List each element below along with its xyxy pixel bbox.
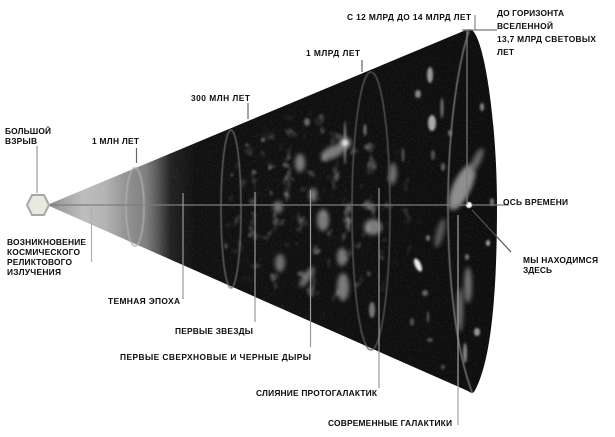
label: time axis: ОСЬ ВРЕМЕНИ xyxy=(503,197,568,207)
label: distance to horizon xyxy=(497,8,596,57)
label: dark ages: ТЕМНАЯ ЭПОХА xyxy=(108,296,180,306)
label: big bang: БОЛЬШОЙ xyxy=(5,125,51,136)
label: first supernovae and black holes: ПЕРВЫЕ СВЕРХНОВЫЕ И ЧЕРНЫЕ ДЫРЫ xyxy=(120,352,311,362)
label: 12 to 14 billion years: С 12 МЛРД ДО 14 МЛРД ЛЕТ xyxy=(347,12,472,22)
label: distance to horizon: ВСЕЛЕННОЙ xyxy=(497,20,553,31)
label: modern galaxies: СОВРЕМЕННЫЕ ГАЛАКТИКИ xyxy=(328,418,452,428)
leader lines xyxy=(37,15,511,425)
label: cosmic microwave background: ИЗЛУЧЕНИЯ xyxy=(7,267,61,277)
label: distance to horizon: 13,7 МЛРД СВЕТОВЫХ xyxy=(497,34,596,44)
cone of the universe xyxy=(47,20,500,400)
ring: 1 million years xyxy=(126,168,144,246)
label: distance to horizon: ЛЕТ xyxy=(497,47,515,57)
ring: 300 million years xyxy=(221,130,241,288)
label: cosmic microwave background: КОСМИЧЕСКОГО xyxy=(7,247,80,257)
label: we are here: МЫ НАХОДИМСЯ xyxy=(523,255,598,265)
icon: big bang hexagon xyxy=(27,195,49,215)
label: 1 million years: 1 МЛН ЛЕТ xyxy=(92,136,140,146)
label: we are here xyxy=(523,255,598,275)
label: first stars: ПЕРВЫЕ ЗВЕЗДЫ xyxy=(175,326,253,336)
label: cosmic microwave background: РЕЛИКТОВОГО xyxy=(7,257,72,267)
galaxy clusters inside the cone xyxy=(200,67,494,369)
label: we are here: ЗДЕСЬ xyxy=(523,265,552,275)
label: cosmic microwave background xyxy=(7,237,86,277)
label: big bang xyxy=(5,125,51,146)
label: protogalaxy mergers: СЛИЯНИЕ ПРОТОГАЛАКТИК xyxy=(256,388,378,398)
nested time rings xyxy=(126,31,472,392)
label: distance to horizon: ДО ГОРИЗОНТА xyxy=(497,8,564,18)
label: big bang: ВЗРЫВ xyxy=(5,136,37,146)
time axis xyxy=(47,204,509,206)
label: 1 billion years: 1 МЛРД ЛЕТ xyxy=(306,48,361,58)
icon: we are here star xyxy=(466,202,472,208)
ring: 1 billion years xyxy=(352,72,390,350)
label: cosmic microwave background: ВОЗНИКНОВЕНИЕ xyxy=(7,237,86,247)
label: 300 million years: 300 МЛН ЛЕТ xyxy=(191,93,251,103)
ring: observable horizon xyxy=(448,31,472,392)
